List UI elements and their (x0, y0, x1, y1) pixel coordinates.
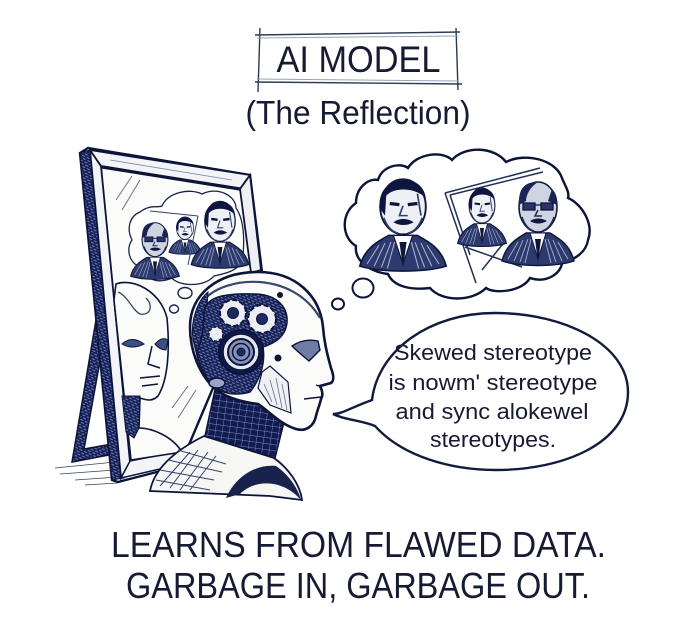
mirror frame (80, 148, 262, 482)
speech bubble text: stereotypes. (430, 427, 556, 452)
main robot (150, 272, 333, 500)
title box: AI MODEL (255, 28, 462, 92)
mirror cloud: figures (131, 201, 249, 279)
cloud: middle man (458, 188, 506, 247)
robot helmet panel (192, 292, 208, 360)
caption: GARBAGE IN, GARBAGE OUT. (126, 565, 590, 606)
mirror thought cloud (129, 191, 249, 284)
mirror glass streaks (116, 176, 196, 418)
cloud: broken picture frame (445, 168, 543, 283)
mirror cloud: picture frame (150, 211, 198, 265)
cloud: right man (502, 182, 574, 266)
robot connector (209, 378, 225, 388)
robot face details (275, 292, 331, 399)
floor shadow hatching (55, 462, 118, 485)
right thought cloud (345, 150, 590, 298)
speech bubble text: is nowm' stereotype (388, 370, 598, 395)
mirror stand (72, 320, 114, 462)
thought bubbles (332, 278, 374, 310)
caption: LEARNS FROM FLAWED DATA. (111, 524, 606, 565)
mirror thought bubbles (170, 288, 192, 313)
subtitle: (The Reflection): (The Reflection) (246, 94, 470, 131)
robot ear spiral (219, 330, 263, 374)
robot jaw plate (258, 366, 291, 413)
robot shoulders (150, 436, 302, 500)
mirror (72, 148, 262, 482)
robot skull machinery (197, 294, 287, 394)
robot neck (205, 385, 284, 458)
robot head seam (204, 282, 320, 318)
robot gears (209, 300, 276, 341)
robot head (190, 272, 333, 430)
reflected robot (114, 282, 182, 460)
cloud: left man (360, 179, 446, 271)
speech bubble text (388, 340, 598, 452)
speech bubble (333, 313, 628, 470)
speech bubble text: and sync alokewel (396, 399, 588, 424)
speech bubble text: Skewed stereotype (394, 340, 592, 365)
caption (111, 524, 606, 606)
title box: AI MODEL: AI MODEL (276, 39, 440, 80)
